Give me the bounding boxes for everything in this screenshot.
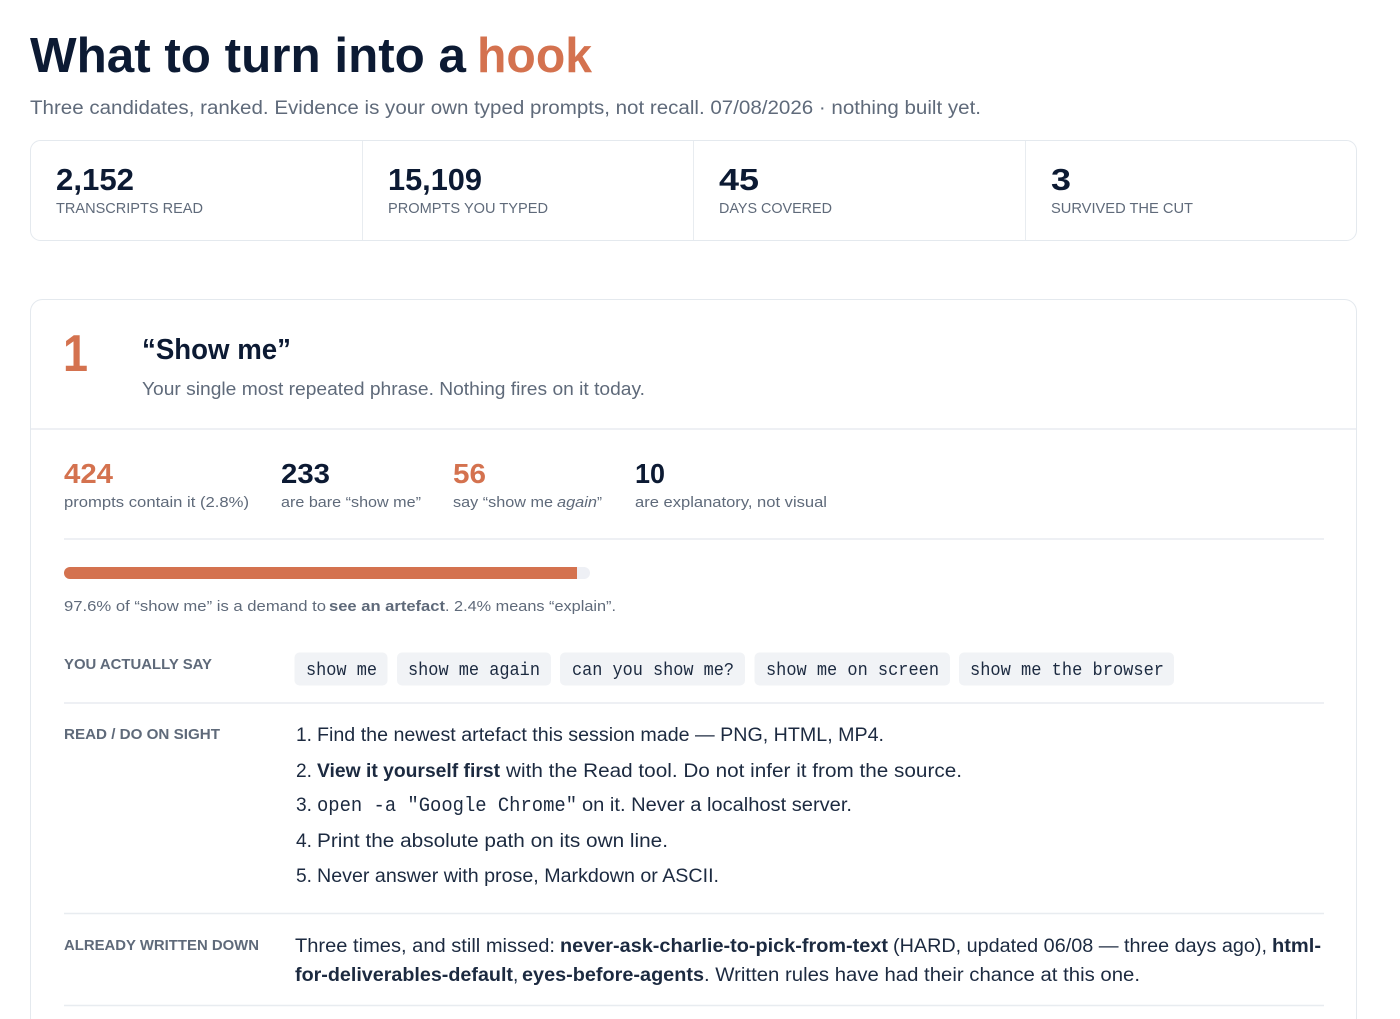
phrase chips: can you show me? [572,661,734,681]
already written text: Three times, and still missed: [295,936,555,957]
candidate heading: “Show me” [142,334,291,366]
stat: prompts typed [388,162,548,217]
numbered steps: Never answer with prose, Markdown or ASCII. [317,866,719,887]
stat: days covered: 45 [719,162,759,197]
already written text: , [513,965,518,986]
already written text: html- [1272,936,1321,957]
already written text: never-ask-charlie-to-pick-from-text [560,936,889,957]
numbered steps: 4. [296,831,312,852]
row label: already written down: ALREADY WRITTEN DOWN [64,937,259,954]
stat: prompts typed: 15,109 [388,162,482,197]
progress bar note: see an artefact [329,598,445,615]
phrase chips [294,652,1174,686]
metric: 10: 10 [635,458,665,489]
stat: survived the cut: 3 [1051,162,1071,197]
numbered steps: Find the newest artefact this session made — PNG, HTML, MP4. [317,725,884,746]
progress bar note [64,598,616,615]
phrase chips: show me [306,661,377,681]
metric: 233: 233 [281,458,330,489]
metric: 233 [281,458,421,511]
already written text: . Written rules have had their chance at this one. [704,965,1140,986]
metric: 10: are explanatory, not visual [635,494,827,511]
subtitle: Three candidates, ranked. Evidence is your own typed prompts, not recall. 07/08/2026 · nothing built yet. [30,98,981,119]
numbered steps: 1. [296,725,312,746]
metric: 56: ” [597,494,602,511]
stat: transcripts read: TRANSCRIPTS READ [56,200,203,217]
numbered steps [296,725,962,887]
row label: read do on sight: READ / DO ON SIGHT [64,726,220,743]
stat: survived the cut [1051,162,1193,217]
candidate description: Your single most repeated phrase. Nothing fires on it today. [142,379,645,399]
metric: 233: are bare “show me” [281,494,421,511]
already written text: eyes-before-agents [522,965,704,986]
numbered steps: open -a "Google Chrome" [317,795,577,818]
summary stats panel [30,140,1356,240]
stat: prompts typed: PROMPTS YOU TYPED [388,200,548,217]
rank number: 1 [63,325,88,383]
progress bar 97.6 percent [64,567,590,579]
stat: days covered: DAYS COVERED [719,200,832,217]
numbered steps: 3. [296,795,312,816]
stat: survived the cut: SURVIVED THE CUT [1051,200,1193,217]
numbered steps: Print the absolute path on its own line. [317,831,668,852]
metric: 424: 424 [64,458,113,489]
title: hook [477,29,593,83]
numbered steps: 2. [296,761,312,782]
already written text: for-deliverables-default [295,965,514,986]
metric: 424 [64,458,249,511]
panel: candidate 1 show me [30,300,1356,1019]
already written text [295,936,1321,986]
metric: 56: say “show me [453,494,553,511]
phrase chips: show me the browser [970,661,1164,681]
progress bar note: 97.6% of “show me” is a demand to [64,598,326,615]
stat: days covered [719,162,832,217]
progress bar note: . 2.4% means “explain”. [445,598,616,615]
metric: 56 [453,458,602,511]
numbered steps: with the Read tool. Do not infer it from the source. [505,761,962,782]
numbered steps: on it. Never a localhost server. [582,795,852,816]
numbered steps: 5. [296,866,312,887]
metric: 10 [635,458,827,511]
already written text: (HARD, updated 06/08 — three days ago), [893,936,1267,957]
metric: 56: again [557,494,597,511]
phrase chips: show me again [408,661,540,681]
row label: you actually say: YOU ACTUALLY SAY [64,656,212,673]
title: What to turn into a [30,29,467,83]
numbered steps: View it yourself first [317,761,501,782]
phrase chips: show me on screen [766,661,939,681]
metric: 56: 56 [453,458,486,489]
metric: 424: prompts contain it (2.8%) [64,494,249,511]
stat: transcripts read: 2,152 [56,162,134,197]
stat: transcripts read [56,162,203,217]
